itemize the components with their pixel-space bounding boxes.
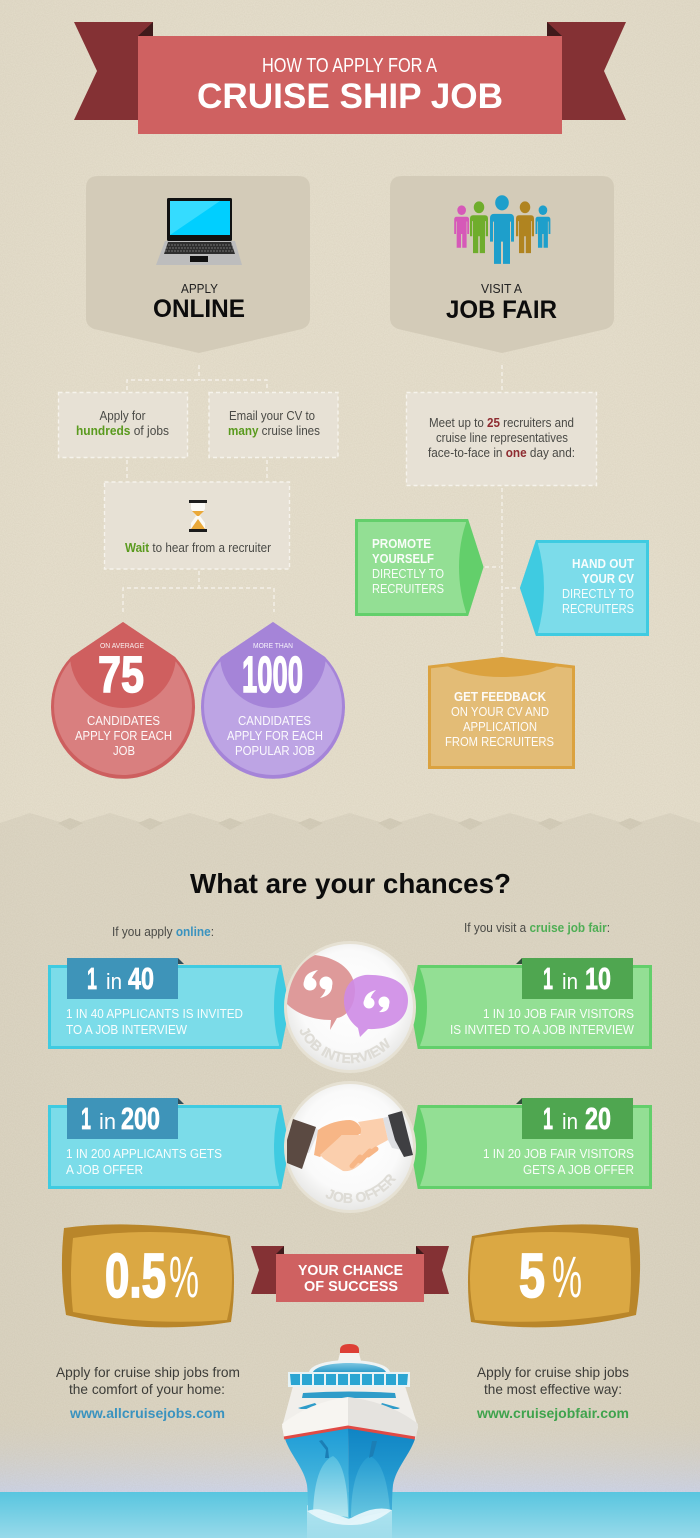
panel: visit a job fair: JOB FAIR xyxy=(446,296,557,324)
callout: hand out your cv: HAND OUT xyxy=(572,557,634,571)
callout: 1000 candidates: CANDIDATES xyxy=(238,714,311,728)
band: 1 in 10 job fair: 1 IN 10 JOB FAIR VISITORS xyxy=(483,1007,634,1021)
box: meet up to 25 recruiters: face-to-face in one day and: xyxy=(428,446,575,460)
callout: get feedback: FROM RECRUITERS xyxy=(445,735,554,749)
band: 1 in 20 job fair: 1 IN 20 JOB FAIR VISITORS xyxy=(483,1147,634,1161)
band: 1 in 200 online: 1 IN 200 APPLICANTS GETS xyxy=(66,1147,222,1161)
callout: promote yourself xyxy=(356,520,483,615)
band: 1 in 20 job fair: 1 xyxy=(543,1101,553,1136)
text: most effective way: the most effective way: xyxy=(484,1381,622,1397)
text: most effective way: www.cruisejobfair.com xyxy=(476,1405,629,1421)
box: meet up to 25 recruiters: cruise line representatives xyxy=(436,431,568,445)
band: 1 in 200 online: A JOB OFFER xyxy=(66,1163,143,1177)
text: apply from home xyxy=(56,1364,240,1421)
callout: 1000 candidates: APPLY FOR EACH xyxy=(227,729,323,743)
callout: 75 candidates: 75 xyxy=(98,646,144,703)
callout: 1000 candidates xyxy=(201,622,345,779)
callout: 75 candidates: CANDIDATES xyxy=(87,714,160,728)
label: job offer: JOB OFFER xyxy=(326,1174,396,1203)
callout: get feedback: ON YOUR CV AND xyxy=(451,705,549,719)
callout: promote yourself: DIRECTLY TO xyxy=(372,567,444,581)
icon: speech bubbles xyxy=(287,955,408,1037)
band: 1 in 40 online: in xyxy=(106,969,122,994)
heading: what are your chances: What are your chances? xyxy=(190,868,511,899)
box: email your cv: Email your CV to xyxy=(229,409,315,423)
text: apply from home: Apply for cruise ship jobs from xyxy=(56,1364,240,1380)
band: 1 in 200 online xyxy=(50,1098,290,1188)
band: 1 in 20 job fair: in xyxy=(562,1109,578,1134)
connector lines xyxy=(123,365,517,655)
band: 1 in 20 job fair: GETS A JOB OFFER xyxy=(523,1163,634,1177)
box: wait to hear from a recruiter xyxy=(104,482,290,569)
text: apply from home: the comfort of your home: xyxy=(69,1381,225,1397)
icon: job offer disc xyxy=(284,1081,416,1213)
plaque: 0.5 percent xyxy=(62,1224,234,1327)
band: 1 in 10 job fair: 10 xyxy=(585,961,611,996)
text: most effective way: Apply for cruise ship jobs xyxy=(477,1364,629,1380)
callout: get feedback: APPLICATION xyxy=(463,720,537,734)
callout: hand out your cv: RECRUITERS xyxy=(562,602,634,616)
callout: hand out your cv xyxy=(520,540,648,636)
band: 1 in 10 job fair xyxy=(410,958,650,1048)
text: most effective way xyxy=(476,1364,629,1421)
band: 1 in 40 online: 1 IN 40 APPLICANTS IS INVITED xyxy=(66,1007,243,1021)
callout: hand out your cv: YOUR CV xyxy=(582,572,635,586)
band: 1 in 10 job fair: IS INVITED TO A JOB INTERVIEW xyxy=(450,1023,634,1037)
box: meet up to 25 recruiters xyxy=(406,392,596,486)
plaque: 5 percent xyxy=(468,1224,640,1327)
box: wait to hear from a recruiter: Wait to hear from a recruiter xyxy=(125,541,271,555)
sea xyxy=(0,1492,700,1538)
band: 1 in 40 online: 1 xyxy=(87,961,97,996)
band: 1 in 200 online: 1 xyxy=(81,1101,91,1136)
icon: cruise ship xyxy=(282,1344,418,1538)
icon: job interview disc xyxy=(284,941,416,1073)
band: 1 in 20 job fair: 20 xyxy=(585,1101,611,1136)
icon: group of people xyxy=(454,195,550,264)
callout: 75 candidates xyxy=(51,622,195,779)
text: if you apply online: If you apply online: xyxy=(112,925,214,939)
box: apply for hundreds of jobs: Apply for xyxy=(100,409,146,423)
callout: get feedback: GET FEEDBACK xyxy=(454,690,546,704)
icon: hourglass xyxy=(189,500,207,532)
band: 1 in 40 online xyxy=(50,958,290,1048)
banner: your chance of success: YOUR CHANCE xyxy=(298,1262,403,1279)
banner: your chance of success xyxy=(251,1246,449,1302)
arc guides xyxy=(294,1007,406,1203)
label: job interview: JOB INTERVIEW xyxy=(300,1028,390,1064)
plaque: 5 percent: 5 xyxy=(519,1242,545,1311)
title banner xyxy=(74,22,626,134)
band: 1 in 200 online: 200 xyxy=(121,1101,160,1136)
plaque: 5 percent: % xyxy=(552,1245,582,1310)
callout: 75 candidates: JOB xyxy=(113,744,135,758)
text: apply from home: www.allcruisejobs.com xyxy=(69,1405,225,1421)
callout: 75 candidates: APPLY FOR EACH xyxy=(75,729,172,743)
panel: visit a job fair: VISIT A xyxy=(481,281,522,296)
title banner: CRUISE SHIP JOB xyxy=(197,77,503,116)
text: if you visit a cruise job fair: If you visit a cruise job fair: xyxy=(464,921,610,935)
band: 1 in 200 online: in xyxy=(99,1109,116,1134)
band: 1 in 10 job fair: 1 xyxy=(543,961,553,996)
icon: laptop xyxy=(156,198,242,265)
panel: apply online: APPLY xyxy=(181,281,218,296)
box: apply for hundreds of jobs: hundreds of jobs xyxy=(76,424,169,438)
box: meet up to 25 recruiters: Meet up to 25 recruiters and xyxy=(429,416,574,430)
plaque: 0.5 percent: 0.5 xyxy=(105,1242,166,1311)
callout: 1000 candidates: MORE THAN xyxy=(253,643,293,650)
callout: promote yourself: PROMOTE xyxy=(372,537,431,551)
band: 1 in 20 job fair xyxy=(410,1098,650,1188)
callout: 1000 candidates: 1000 xyxy=(242,646,303,703)
box: apply for hundreds of jobs xyxy=(58,392,188,458)
icon: handshake xyxy=(287,1111,413,1171)
callout: 75 candidates: ON AVERAGE xyxy=(100,643,144,650)
band: 1 in 40 online: 40 xyxy=(128,961,154,996)
banner: your chance of success: OF SUCCESS xyxy=(304,1278,398,1295)
callout: 1000 candidates: POPULAR JOB xyxy=(235,744,315,758)
title banner: HOW TO APPLY FOR A xyxy=(262,55,438,77)
callout: promote yourself: YOURSELF xyxy=(372,552,434,566)
box: email your cv: many cruise lines xyxy=(228,424,320,438)
box: email your cv xyxy=(209,392,338,458)
panel: apply online: ONLINE xyxy=(153,295,245,323)
panel: apply online xyxy=(86,176,310,353)
callout: hand out your cv: DIRECTLY TO xyxy=(562,587,634,601)
band: 1 in 40 online: TO A JOB INTERVIEW xyxy=(66,1023,187,1037)
callout: promote yourself: RECRUITERS xyxy=(372,582,444,596)
plaque: 0.5 percent: % xyxy=(169,1245,199,1310)
band: 1 in 10 job fair: in xyxy=(562,969,578,994)
callout: get feedback xyxy=(430,657,574,768)
panel: visit a job fair xyxy=(390,176,614,353)
